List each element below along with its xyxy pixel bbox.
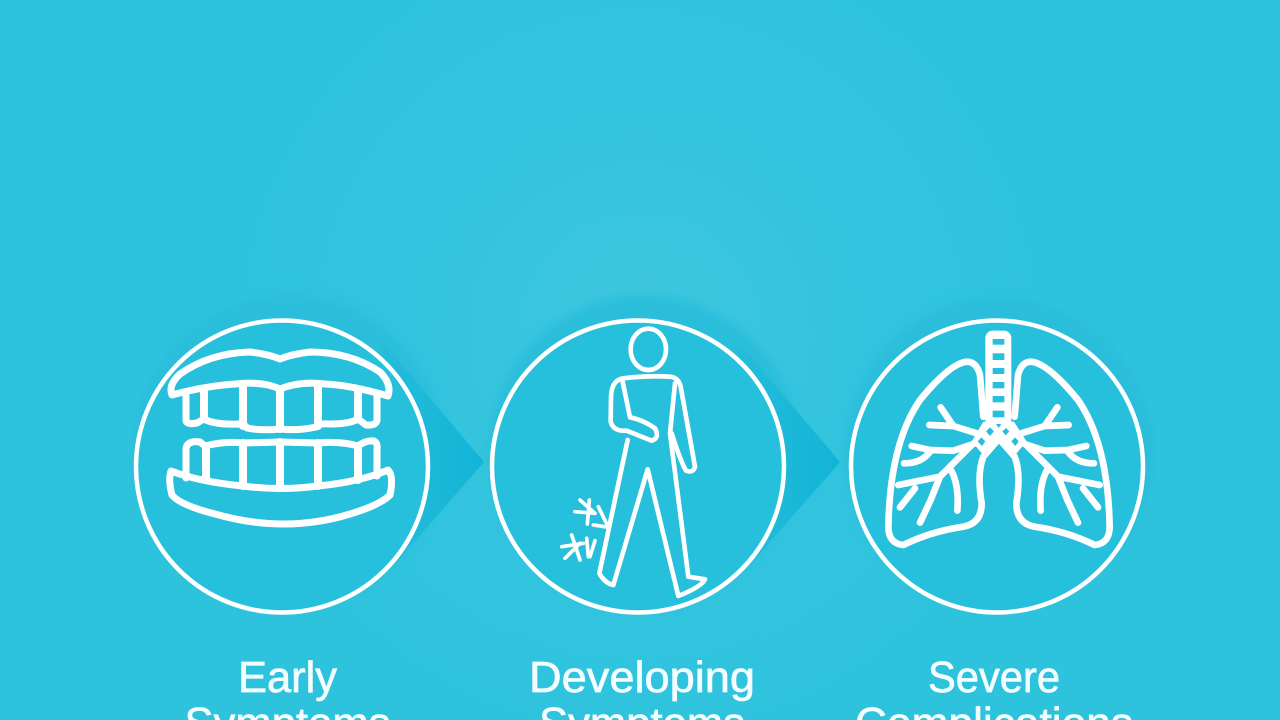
icon: lungs xyxy=(888,331,1110,545)
label: developing symptoms: Developing xyxy=(529,653,755,702)
circle outline xyxy=(136,320,428,612)
circle outline xyxy=(492,320,784,612)
icon: teeth and gums xyxy=(170,352,392,524)
icon: walking person with leg pain xyxy=(562,329,705,596)
right lung xyxy=(999,362,1110,545)
label: early symptoms: Early xyxy=(238,653,337,702)
panel: early symptoms xyxy=(133,295,484,612)
left lung xyxy=(888,362,999,545)
panel: developing symptoms xyxy=(489,295,840,612)
circle halo xyxy=(133,295,443,605)
circle outline xyxy=(851,320,1143,612)
bronchi xyxy=(972,422,1027,455)
icon detail: pain marks xyxy=(562,500,608,560)
circle halo xyxy=(845,297,1155,607)
label: severe complications: Severe xyxy=(928,653,1060,702)
trachea xyxy=(985,331,1011,427)
arrow shadow: developing to severe xyxy=(686,345,840,558)
circle halo xyxy=(489,295,799,605)
arrow shadow: early to developing xyxy=(330,345,484,558)
panel: severe complications xyxy=(845,297,1155,612)
